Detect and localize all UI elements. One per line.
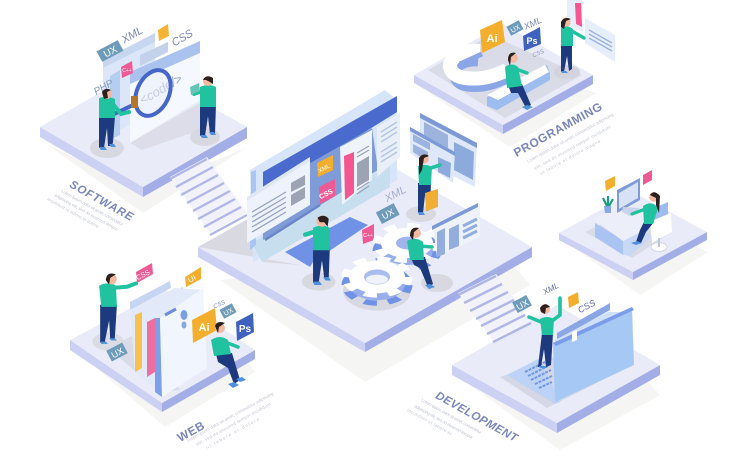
tag UX: UX — [102, 44, 120, 60]
icon: plant — [603, 196, 613, 213]
text block: development: adipiscing elit, sed do eiusmod tempor — [414, 404, 474, 440]
icon: pink css tile — [318, 179, 335, 204]
person: man at monitor — [302, 216, 335, 291]
text block: web: Lorem ipsum dolor sit amet, consectetur adipiscing — [186, 391, 275, 443]
text block: web: ut labore et dolore — [205, 416, 260, 450]
scene: web — [92, 263, 254, 397]
text block: development: incididunt ut labore et — [407, 408, 453, 436]
heading: web: WEB — [175, 418, 207, 445]
icon: gold tile: XML — [318, 163, 332, 175]
stairs: main to development — [458, 274, 531, 342]
tag CSS pink — [135, 263, 153, 283]
tag gold dev — [568, 292, 579, 308]
tag C++ center — [362, 224, 374, 244]
window: tall — [340, 130, 372, 205]
person: standing man web — [92, 274, 136, 351]
tag gold — [158, 24, 169, 41]
scene: desk — [593, 170, 672, 256]
tag UI gold: UI — [186, 273, 197, 285]
scene: development — [507, 281, 634, 404]
icon: Ps tile — [523, 27, 541, 51]
tag UX prog — [506, 20, 524, 36]
laptop lid — [553, 307, 634, 402]
text block: programming: ut labore et dolore magna — [539, 138, 601, 176]
tag CSS pink: CSS — [135, 269, 152, 282]
panel: desk platform — [559, 192, 708, 295]
panel: web platform — [70, 290, 255, 427]
tag UX center — [376, 203, 400, 224]
tag C++ center: C++ — [363, 233, 373, 239]
monitor stand — [285, 217, 368, 267]
icon: Ai tile — [480, 20, 505, 53]
tag XML: XML — [119, 25, 145, 47]
tag UX web — [106, 342, 128, 362]
scene: programming — [450, 0, 615, 110]
text block: programming: Lorem ipsum dolor sit amet, consectetur adipiscing — [526, 112, 615, 164]
person: woman at desk — [631, 192, 660, 245]
gear back — [377, 226, 437, 269]
person: standing woman — [554, 17, 584, 79]
floating data window — [432, 203, 480, 257]
tag CSS: CSS — [170, 27, 196, 49]
text block: programming: elit, sed do eiusmod tempor incididunt — [533, 124, 612, 171]
stairs: software to main — [170, 157, 247, 235]
person: seated woman programmer — [505, 53, 533, 110]
strip pink — [147, 318, 155, 377]
icon: Ai tile web — [192, 308, 217, 343]
icon: magnifying glass — [110, 64, 178, 122]
floating window front — [410, 127, 455, 183]
floating window back — [420, 113, 477, 187]
panel: programming platform — [414, 24, 596, 147]
heading: development: DEVELOPMENT — [433, 390, 520, 445]
text block: web: elit, sed do eiusmod tempor incididunt — [195, 401, 272, 447]
icon: monitor — [617, 178, 640, 216]
text block: software: incididunt ut labore et dolore — [47, 197, 100, 229]
panel: software platform — [40, 68, 247, 213]
icon: Ai tile: Ai — [486, 33, 498, 45]
back tabs — [130, 281, 205, 392]
bench — [487, 65, 550, 110]
icon: Ps tile web — [236, 313, 254, 341]
tag XML prog: XML — [521, 15, 543, 32]
icon: pink css tile: CSS — [318, 188, 335, 201]
code window: <code/> — [137, 71, 185, 107]
tile pink — [643, 170, 652, 185]
icon: Ai tile web: Ai — [198, 322, 210, 334]
panel: main platform — [198, 151, 532, 382]
tag CSS small: CSS — [213, 300, 226, 310]
icon: gold tile — [317, 155, 333, 177]
tag UX dev: UX — [515, 298, 530, 312]
person: bearded man — [90, 89, 129, 158]
desk — [593, 203, 660, 256]
chair — [650, 202, 672, 252]
side window — [585, 18, 615, 62]
strip yellow — [135, 312, 142, 372]
tag UX web: UX — [110, 346, 125, 360]
scene: software — [90, 24, 220, 158]
person: man arms raised — [529, 298, 560, 368]
icon: Ps tile web: Ps — [239, 324, 252, 335]
tag UX prog: UX — [510, 24, 522, 35]
panel pink — [567, 0, 583, 32]
front panel — [155, 288, 207, 397]
heading: software: SOFTWARE — [67, 179, 136, 224]
person: seated man web — [211, 322, 246, 388]
tag UX small: UX — [223, 307, 235, 318]
tag CSS prog: CSS — [532, 49, 545, 59]
window: side — [377, 113, 400, 177]
laptop back — [555, 303, 625, 348]
window: article — [247, 157, 320, 243]
tile gold — [605, 176, 615, 191]
text block: software: Lorem ipsum dolor sit amet, consectetur — [61, 189, 125, 227]
panel: development platform — [452, 305, 660, 450]
gear front — [343, 259, 411, 311]
tag UX small — [219, 303, 237, 319]
tag XML center: XML — [382, 184, 408, 205]
laptop keyboard — [507, 358, 560, 404]
tag UI gold — [185, 267, 201, 287]
text block: software: adipiscing elit, sed do eiusmod tempor — [54, 193, 119, 232]
scene: monitor — [247, 90, 480, 311]
monitor body — [250, 90, 397, 262]
person: seated woman — [407, 228, 453, 292]
person: man holding tablet — [190, 76, 220, 146]
back window — [103, 38, 155, 140]
tag XML dev: XML — [541, 281, 560, 297]
heading: programming: PROGRAMMING — [511, 99, 605, 160]
tag UX center: UX — [380, 207, 396, 221]
big letter C — [450, 51, 507, 88]
tag CSS dev: CSS — [576, 298, 597, 315]
icon: Ps tile: Ps — [526, 36, 538, 46]
tag C++: C++ — [122, 68, 132, 74]
text block: development: Lorem ipsum dolor sit amet, consectetur — [421, 398, 483, 435]
tag PHP: PHP — [92, 78, 116, 98]
person: woman with bag — [406, 154, 440, 222]
